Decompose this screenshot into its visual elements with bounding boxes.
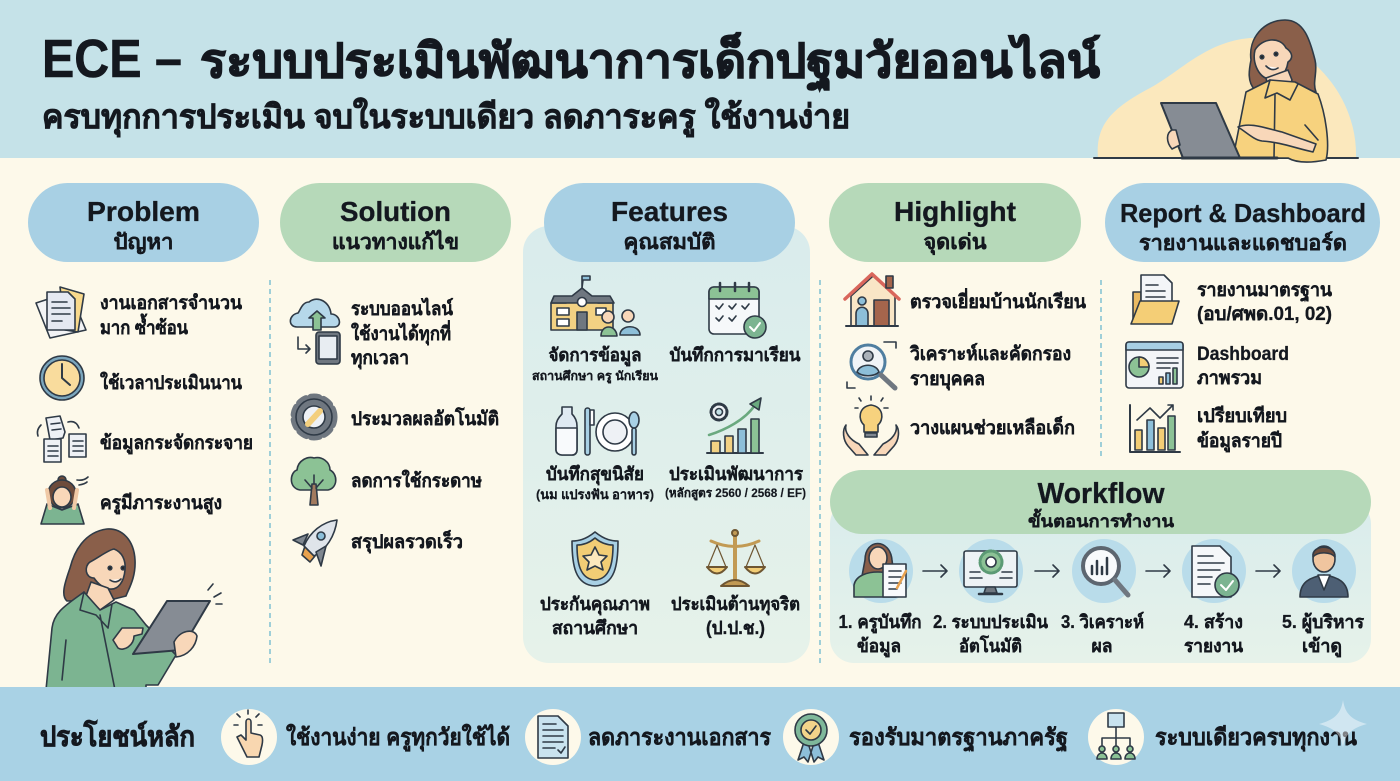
text: development assessment: (หลักสูตร 2560 / 2568 / EF) bbox=[665, 486, 806, 501]
text: quality assurance: สถานศึกษา bbox=[552, 618, 638, 638]
text: anti-corruption bbox=[671, 594, 800, 638]
arrow bbox=[923, 565, 947, 577]
step 5: executive reviews: 5. ผู้บริหาร bbox=[1282, 612, 1364, 634]
arrow bbox=[1146, 565, 1170, 577]
title: ระบบประเมินพัฒนาการเด็กปฐมวัยออนไลน์ bbox=[200, 31, 1101, 92]
pill: Solution bbox=[280, 183, 511, 262]
pill: Features bbox=[544, 183, 795, 262]
step 2: automatic assessment: 2. ระบบประเมิน bbox=[933, 612, 1049, 632]
subtitle: ครบทุกการประเมิน จบในระบบเดียว ลดภาระครู ใช้งานง่าย bbox=[42, 97, 850, 138]
benefit: government standards bbox=[783, 709, 1068, 765]
panel: features background bbox=[523, 226, 810, 663]
text: home visit: ตรวจเยี่ยมบ้านนักเรียน bbox=[910, 288, 1086, 313]
text: reduce paper: ลดการใช้กระดาษ bbox=[351, 469, 482, 492]
icon: tree bbox=[291, 458, 336, 505]
pill: Report and Dashboard: Report & Dashboard bbox=[1120, 198, 1366, 228]
pill: Report and Dashboard: รายงานและแดชบอร์ด bbox=[1139, 231, 1347, 255]
icon: yearly comparison chart bbox=[1130, 405, 1180, 452]
solution list bbox=[290, 297, 499, 566]
text: attendance: บันทึกการมาเรียน bbox=[670, 345, 801, 365]
text: standard report: รายงานมาตรฐาน bbox=[1197, 280, 1332, 303]
sparkle mark bbox=[1319, 700, 1367, 748]
step 1: teacher records: 1. ครูบันทึก bbox=[838, 612, 922, 634]
step 5: executive reviews bbox=[1282, 539, 1364, 658]
text: analysis and screening: รายบุคคล bbox=[910, 369, 985, 391]
text: yearly comparison bbox=[1197, 405, 1287, 453]
text: dashboard overview: Dashboard bbox=[1197, 344, 1289, 365]
step 3: analyze: 3. วิเคราะห์ bbox=[1061, 611, 1144, 632]
text: automatic processing: ประมวลผลอัตโนมัติ bbox=[351, 407, 499, 430]
text: scattered data: ข้อมูลกระจัดกระจาย bbox=[100, 432, 253, 455]
text: data management: จัดการข้อมูล bbox=[548, 345, 642, 367]
step 3: analyze bbox=[1061, 539, 1144, 656]
pill: workflow heading bbox=[830, 470, 1371, 534]
features grid bbox=[532, 276, 806, 638]
icon: attendance calendar bbox=[709, 283, 766, 338]
panel: workflow bbox=[830, 470, 1371, 663]
text: many documents: งานเอกสารจำนวน bbox=[100, 293, 242, 314]
step 4: create report: 4. สร้าง bbox=[1184, 612, 1243, 632]
icon: idea in hands bbox=[844, 396, 898, 455]
benefit: less paperwork: ลดภาระงานเอกสาร bbox=[588, 724, 772, 750]
icon: dashboard bbox=[1126, 342, 1183, 388]
text: long assessment time: ใช้เวลาประเมินนาน bbox=[100, 371, 242, 394]
text: analysis and screening bbox=[910, 343, 1071, 391]
pill: Solution: แนวทางแก้ไข bbox=[332, 229, 459, 254]
icon: scattered files bbox=[37, 416, 86, 462]
benefit: single system bbox=[1088, 709, 1357, 765]
text: online anytime bbox=[351, 297, 453, 370]
benefit: less paperwork bbox=[525, 709, 772, 765]
icon: rocket bbox=[293, 520, 337, 566]
text: many documents: มาก ซ้ำซ้อน bbox=[100, 313, 188, 339]
footer heading: ประโยชน์หลัก bbox=[40, 719, 195, 752]
illustration: teacher with laptop bbox=[1094, 20, 1358, 162]
arrow bbox=[1256, 565, 1280, 577]
icon: scales bbox=[707, 530, 765, 586]
text: quality assurance bbox=[540, 594, 650, 638]
text: data management bbox=[532, 345, 659, 384]
arrow bbox=[1035, 565, 1059, 577]
pill: Report and Dashboard bbox=[1105, 183, 1380, 262]
text: high workload: ครูมีภาระงานสูง bbox=[100, 492, 222, 515]
problem list bbox=[36, 287, 253, 524]
pill: Highlight bbox=[829, 183, 1081, 262]
text: standard report bbox=[1197, 280, 1332, 325]
text: dashboard overview: ภาพรวม bbox=[1197, 368, 1262, 389]
icon: development chart bbox=[707, 398, 763, 453]
pill: Solution: Solution bbox=[340, 196, 451, 227]
step 4: create report: รายงาน bbox=[1184, 636, 1244, 656]
header band bbox=[0, 0, 1400, 158]
text: online anytime: ทุกเวลา bbox=[351, 348, 409, 370]
step 3: analyze: ผล bbox=[1092, 636, 1112, 656]
text: development assessment: ประเมินพัฒนาการ bbox=[669, 464, 803, 484]
title: ECE – bbox=[42, 29, 182, 89]
text: online anytime: ระบบออนไลน์ bbox=[351, 297, 453, 320]
pill: Highlight: จุดเด่น bbox=[924, 231, 987, 256]
icon: gear bbox=[294, 397, 334, 437]
footer band bbox=[0, 687, 1400, 781]
text: yearly comparison: เปรียบเทียบ bbox=[1197, 405, 1287, 427]
text: hygiene record: (นม แปรงฟัน อาหาร) bbox=[536, 487, 654, 502]
step 4: create report bbox=[1182, 539, 1246, 656]
text: dashboard overview bbox=[1197, 344, 1289, 389]
benefit: easy to use bbox=[221, 709, 510, 765]
step 2: automatic assessment: อัตโนมัติ bbox=[959, 635, 1022, 656]
text: hygiene record bbox=[536, 464, 654, 502]
step 2: automatic assessment bbox=[933, 539, 1049, 656]
icon: school and people bbox=[551, 276, 640, 336]
text: child support plan: วางแผนช่วยเหลือเด็ก bbox=[910, 415, 1075, 439]
text: quality assurance: ประกันคุณภาพ bbox=[540, 594, 650, 616]
text: hygiene record: บันทึกสุขนิสัย bbox=[546, 464, 644, 486]
step 1: teacher records: ข้อมูล bbox=[857, 636, 901, 658]
pill: Features: คุณสมบัติ bbox=[624, 231, 716, 256]
text: online anytime: ใช้งานได้ทุกที่ bbox=[351, 320, 451, 346]
benefit: easy to use: ใช้งานง่าย ครูทุกวัยใช้ได้ bbox=[286, 723, 510, 752]
text: anti-corruption: (ป.ป.ช.) bbox=[706, 618, 765, 638]
text: many documents bbox=[100, 293, 242, 339]
step 1: teacher records bbox=[838, 539, 922, 658]
benefit: government standards: รองรับมาตรฐานภาครัฐ bbox=[849, 724, 1068, 752]
icon: cloud and tablet bbox=[290, 299, 340, 364]
pill: Features: Features bbox=[611, 196, 728, 227]
icon: hygiene items bbox=[556, 407, 639, 455]
text: quick summary: สรุปผลรวดเร็ว bbox=[351, 529, 463, 554]
icon: report folder bbox=[1131, 275, 1179, 324]
highlight list bbox=[844, 274, 1086, 455]
pill: Problem: Problem bbox=[87, 196, 200, 227]
title bbox=[42, 29, 1101, 92]
icon: analysis magnifier bbox=[847, 342, 896, 388]
report list bbox=[1126, 275, 1332, 453]
icon: clock bbox=[40, 356, 84, 400]
icon: stressed teacher bbox=[41, 476, 88, 524]
icon: home visit bbox=[845, 274, 899, 326]
text: data management: สถานศึกษา ครู นักเรียน bbox=[532, 369, 659, 384]
illustration: teacher with tablet bbox=[46, 529, 222, 690]
pill: workflow heading: Workflow bbox=[1038, 478, 1165, 510]
text: yearly comparison: ข้อมูลรายปี bbox=[1197, 430, 1282, 453]
text: anti-corruption: ประเมินต้านทุจริต bbox=[671, 594, 800, 616]
icon: quality shield bbox=[572, 532, 618, 586]
pill: Problem: ปัญหา bbox=[114, 231, 174, 255]
pill: workflow heading: ขั้นตอนการทำงาน bbox=[1028, 508, 1174, 531]
icon: document stack bbox=[36, 287, 86, 338]
text: analysis and screening: วิเคราะห์และคัดกรอง bbox=[910, 343, 1071, 365]
text: development assessment bbox=[665, 464, 806, 501]
pill: Highlight: Highlight bbox=[894, 196, 1016, 227]
pill: Problem bbox=[28, 183, 259, 262]
text: standard report: (อบ/ศพด.01, 02) bbox=[1197, 304, 1332, 325]
benefit: single system: ระบบเดียวครบทุกงาน bbox=[1155, 724, 1357, 752]
step 5: executive reviews: เข้าดู bbox=[1302, 636, 1342, 658]
